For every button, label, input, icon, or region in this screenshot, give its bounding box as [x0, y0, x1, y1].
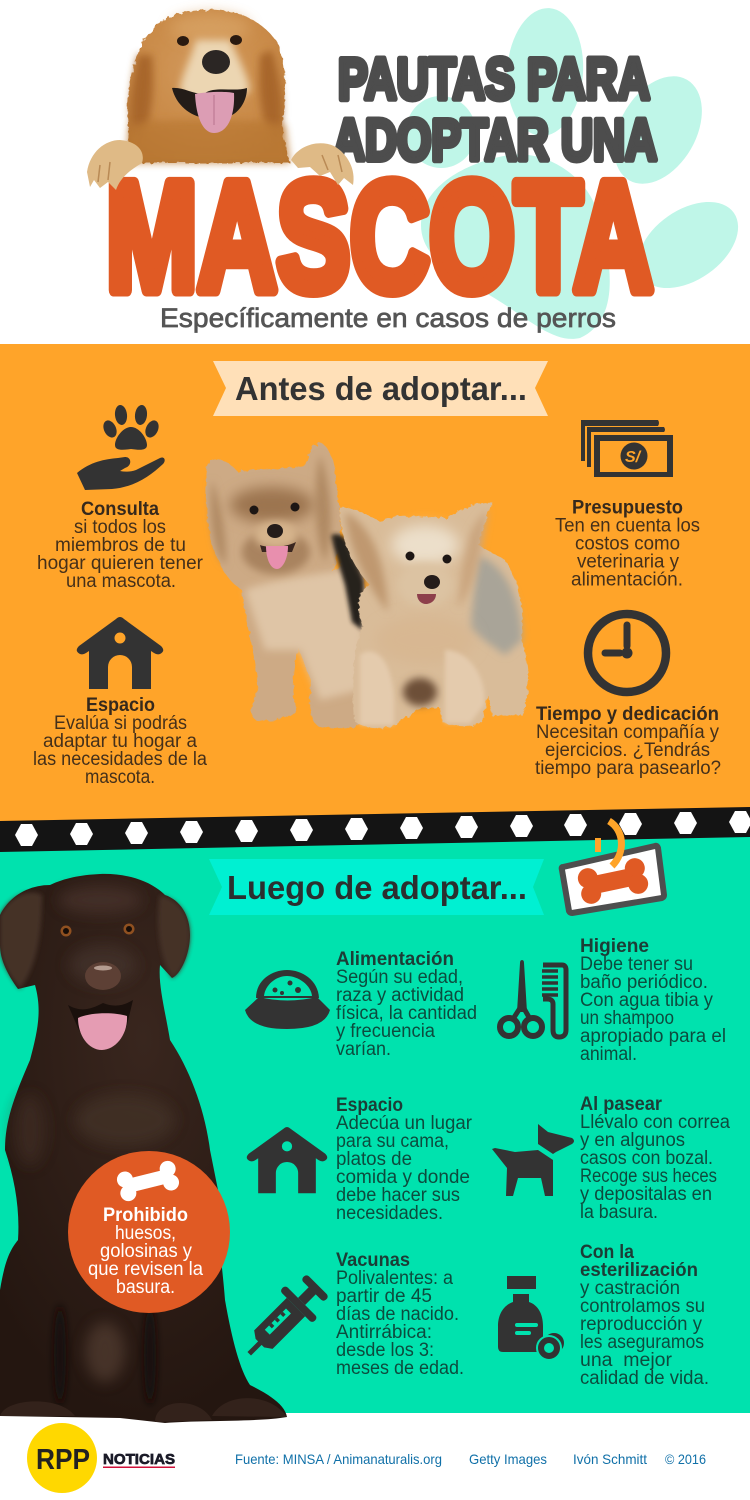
- background: white header: [0, 0, 750, 344]
- title: pautas para adoptar una: ADOPTAR UNA: [333, 108, 657, 173]
- logo: rpp noticias: NOTICIAS: [103, 1451, 175, 1468]
- photo: golden retriever: [87, 10, 354, 190]
- text: consulta: Consulta: [81, 499, 159, 520]
- paw: left: [87, 140, 143, 190]
- text: vacunas: Vacunas: [336, 1250, 410, 1271]
- text: al pasear: casos con bozal.: [580, 1148, 713, 1169]
- text: con la esterilizacion: [580, 1242, 709, 1389]
- source credits: Getty Images: [469, 1451, 547, 1467]
- icon: walking dog: [492, 1124, 574, 1196]
- text: presupuesto: [555, 498, 700, 590]
- text: con la esterilizacion: calidad de vida.: [580, 1368, 709, 1389]
- text: al pasear: Al pasear: [580, 1094, 663, 1115]
- text: espacio: [336, 1095, 473, 1224]
- text: con la esterilizacion: controlamos su: [580, 1296, 705, 1317]
- text: higiene: un shampoo: [580, 1008, 674, 1029]
- text: tiempo y dedicacion: [535, 704, 721, 779]
- text: higiene: Con agua tibia y: [580, 990, 713, 1011]
- text: espacio: adaptar tu hogar a: [43, 731, 197, 752]
- band: hexagon film strip: [0, 807, 750, 852]
- text: presupuesto: veterinaria y: [577, 552, 679, 572]
- photo: two yorkshire terriers: [206, 443, 528, 728]
- icon: banknotes: S/: [625, 449, 642, 466]
- text: espacio: las necesidades de la: [33, 749, 207, 770]
- text: espacio: Evalúa si podrás: [54, 713, 187, 734]
- background paw print: [400, 6, 750, 339]
- title: pautas para adoptar una: PAUTAS PARA: [338, 47, 650, 112]
- text: con la esterilizacion: esterilización: [580, 1260, 698, 1281]
- text: tiempo y dedicacion: ejercicios. ¿Tendrás: [545, 740, 710, 761]
- text: alimentacion: [336, 949, 477, 1060]
- source credits: Ivón Schmitt: [573, 1451, 647, 1467]
- text: consulta: miembros de tu: [55, 535, 186, 556]
- text: espacio: Espacio: [336, 1095, 403, 1116]
- text: tiempo y dedicacion: Tiempo y dedicación: [536, 704, 719, 725]
- text: higiene: baño periódico.: [580, 972, 708, 993]
- callout: prohibido: que revisen la: [88, 1259, 203, 1280]
- logo: rpp noticias: RPP: [36, 1444, 90, 1476]
- text: vacunas: desde los 3:: [336, 1340, 434, 1361]
- text: alimentacion: física, la cantidad: [336, 1003, 477, 1024]
- text: al pasear: y depositalas en: [580, 1184, 712, 1205]
- icon: scissors and comb: [500, 960, 566, 1037]
- text: espacio: debe hacer sus: [336, 1185, 460, 1206]
- icon: clock: [588, 614, 666, 692]
- text: espacio: comida y donde: [336, 1167, 470, 1188]
- text: al pasear: la basura.: [580, 1202, 658, 1223]
- photo: chocolate labrador: [0, 874, 287, 1423]
- icon: food bowl: [245, 970, 330, 1029]
- text: consulta: hogar quieren tener: [37, 553, 204, 574]
- text: espacio: Espacio: [86, 695, 155, 716]
- icon: bone tag: [562, 821, 664, 913]
- text: alimentacion: varían.: [336, 1039, 391, 1060]
- subtitle: Específicamente en casos de perros: [160, 303, 616, 333]
- text: higiene: animal.: [580, 1044, 637, 1065]
- text: con la esterilizacion: una mejor: [580, 1350, 673, 1371]
- text: consulta: si todos los: [74, 517, 166, 538]
- banner: antes de adoptar: [213, 361, 548, 416]
- text: higiene: Higiene: [580, 936, 649, 957]
- text: al pasear: Recoge sus heces: [580, 1166, 717, 1187]
- source credits: [235, 1451, 706, 1467]
- icon: house: [77, 617, 163, 689]
- text: espacio: Adecúa un lugar: [336, 1113, 473, 1134]
- text: presupuesto: costos como: [575, 534, 680, 554]
- text: tiempo y dedicacion: tiempo para pasearlo?: [535, 758, 721, 779]
- callout: prohibido: [68, 1151, 230, 1313]
- text: alimentacion: raza y actividad: [336, 985, 464, 1006]
- icon: medicine bottle: [498, 1276, 565, 1360]
- paw: right: [291, 143, 354, 185]
- text: espacio: para su cama,: [336, 1131, 449, 1152]
- text: espacio: [33, 695, 207, 788]
- callout: prohibido: basura.: [116, 1277, 175, 1298]
- callout: prohibido: huesos,: [115, 1223, 176, 1244]
- text: alimentacion: Según su edad,: [336, 967, 463, 988]
- logo: rpp noticias: [27, 1423, 175, 1493]
- icon: banknotes: [581, 420, 673, 477]
- text: al pasear: Llévalo con correa: [580, 1112, 730, 1133]
- icon: doghouse: [247, 1127, 327, 1193]
- text: vacunas: partir de 45: [336, 1286, 432, 1307]
- text: espacio: mascota.: [85, 767, 155, 788]
- text: con la esterilizacion: y castración: [580, 1278, 680, 1299]
- banner: luego de adoptar: Luego de adoptar...: [227, 869, 527, 906]
- banner: antes de adoptar: Antes de adoptar...: [235, 370, 527, 407]
- text: presupuesto: Presupuesto: [572, 498, 683, 518]
- icon: syringe: [233, 1269, 334, 1370]
- text: alimentacion: Alimentación: [336, 949, 454, 970]
- text: vacunas: [336, 1250, 464, 1379]
- text: presupuesto: alimentación.: [571, 570, 683, 590]
- source credits: Fuente: MINSA / Animanaturalis.org: [235, 1451, 442, 1467]
- text: al pasear: y en algunos: [580, 1130, 685, 1151]
- panel: luego de adoptar: [0, 807, 750, 1423]
- text: consulta: [37, 499, 204, 592]
- text: higiene: [580, 936, 726, 1065]
- text: con la esterilizacion: Con la: [580, 1242, 634, 1263]
- footer: [27, 1423, 706, 1493]
- callout: prohibido: golosinas y: [100, 1241, 192, 1262]
- text: vacunas: días de nacido.: [336, 1304, 459, 1325]
- text: presupuesto: Ten en cuenta los: [555, 516, 700, 536]
- text: espacio: necesidades.: [336, 1203, 443, 1224]
- text: consulta: una mascota.: [66, 571, 176, 592]
- text: con la esterilizacion: reproducción y: [580, 1314, 702, 1335]
- text: vacunas: meses de edad.: [336, 1358, 464, 1379]
- panel: antes de adoptar: [0, 344, 750, 824]
- text: al pasear: [580, 1094, 730, 1223]
- icon: white bone: [115, 1159, 181, 1203]
- text: higiene: apropiado para el: [580, 1026, 726, 1047]
- text: vacunas: Polivalentes: a: [336, 1268, 453, 1289]
- text: vacunas: Antirrábica:: [336, 1322, 432, 1343]
- text: espacio: platos de: [336, 1149, 412, 1170]
- text: con la esterilizacion: les aseguramos: [580, 1332, 704, 1353]
- text: higiene: Debe tener su: [580, 954, 693, 975]
- source credits: © 2016: [665, 1451, 706, 1467]
- banner: luego de adoptar: [209, 859, 544, 915]
- title: pautas para adoptar una: [333, 47, 657, 173]
- text: tiempo y dedicacion: Necesitan compañía y: [536, 722, 719, 743]
- text: alimentacion: y frecuencia: [336, 1021, 435, 1042]
- icon: hand holding paw: [77, 404, 165, 490]
- callout: prohibido: Prohibido: [103, 1205, 188, 1226]
